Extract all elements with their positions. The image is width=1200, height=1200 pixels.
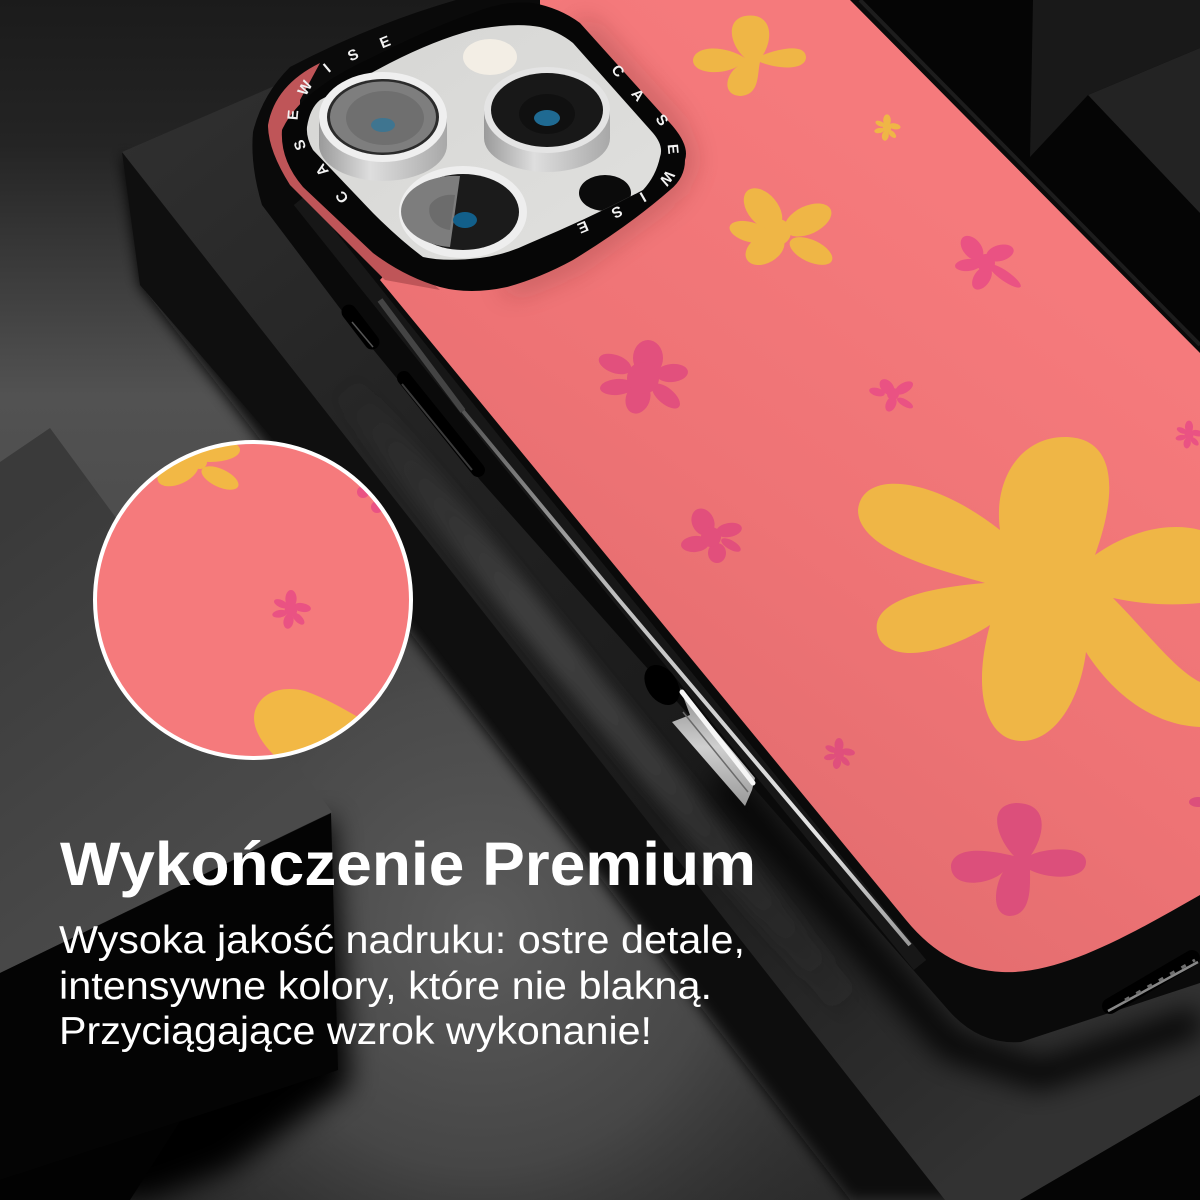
upper right block top face <box>1088 48 1200 213</box>
flower: pink edge <box>1175 421 1200 449</box>
zoom circle detail <box>95 438 411 760</box>
power button <box>637 658 755 806</box>
brand text: CASEWISE right arc: E <box>664 143 681 155</box>
upper right background block <box>1030 0 1200 157</box>
case lip crescent <box>268 63 440 290</box>
heading: Wykończenie Premium <box>60 830 756 898</box>
case highlight stripe <box>463 411 910 945</box>
description <box>59 919 745 1053</box>
brand text: CASEWISE left arc: E <box>377 33 393 52</box>
flower: pink right edge <box>1189 797 1200 807</box>
floor light pool <box>0 500 910 1200</box>
flower: circle right pink <box>357 486 383 513</box>
camera bezel <box>282 2 686 291</box>
flower: pink bottom <box>951 803 1086 916</box>
flower: circle top yellow <box>158 444 240 490</box>
circle ring <box>95 442 411 758</box>
phone cast shadow <box>720 780 1200 1075</box>
pedestal top highlight band <box>340 380 860 1020</box>
flower: circle pink <box>272 590 312 630</box>
flower: pink upper right <box>955 236 1021 290</box>
circle fill <box>95 442 411 758</box>
brand text: CASEWISE right arc <box>575 62 681 236</box>
pedestal bottom right front face <box>1020 1095 1200 1200</box>
brand text: CASEWISE left arc: W <box>295 77 317 99</box>
brand text: CASEWISE right arc: S <box>652 111 671 129</box>
case side glare <box>380 300 463 411</box>
brand text: CASEWISE left arc <box>285 33 393 206</box>
flower: yellow small <box>874 114 901 141</box>
lens: left <box>319 72 447 181</box>
brand text: CASEWISE right arc: A <box>628 86 648 105</box>
lower left block shadow <box>0 815 350 1200</box>
brand text: CASEWISE left arc: A <box>312 160 332 179</box>
flower: yellow top <box>693 16 806 96</box>
camera island <box>268 2 686 291</box>
brand text: CASEWISE right arc: W <box>655 167 678 189</box>
flower pattern <box>507 16 1200 916</box>
right edge glint <box>860 0 1200 345</box>
upper right black recess <box>850 0 1200 353</box>
brand text: CASEWISE left arc: E <box>285 109 302 121</box>
brand text: CASEWISE left arc: S <box>345 46 361 65</box>
camera shadow on panel <box>507 23 685 287</box>
pedestal side face <box>122 152 700 860</box>
flower: pink small <box>869 379 913 412</box>
brand text: CASEWISE right arc: I <box>637 188 649 205</box>
description line 3: Przyciągające wzrok wykonanie! <box>59 1010 652 1053</box>
charging port <box>1108 958 1198 1011</box>
upper side button <box>349 312 373 347</box>
pedestal side shadow <box>122 152 1000 1200</box>
flower: pink lower small <box>824 738 856 770</box>
brand text: CASEWISE left arc: S <box>291 137 310 152</box>
brand text: CASEWISE left arc: C <box>332 187 352 206</box>
text block <box>59 830 756 1053</box>
flash <box>463 39 517 75</box>
case body <box>252 0 1200 1042</box>
phone case <box>252 0 1200 1042</box>
lidar sensor <box>579 175 631 211</box>
lower left block front face <box>0 813 338 1180</box>
description line 2: intensywne kolory, które nie blakną. <box>59 965 712 1008</box>
lens: right <box>484 67 610 172</box>
brand text: CASEWISE right arc: S <box>609 202 625 221</box>
camera glass plate <box>307 25 661 260</box>
brand text: CASEWISE right arc: C <box>608 62 628 81</box>
lens: bottom <box>399 166 527 258</box>
flower: big yellow <box>858 437 1200 741</box>
description line 1: Wysoka jakość nadruku: ostre detale, <box>59 919 745 962</box>
flower: pink middle <box>680 505 743 563</box>
lower left block top face <box>0 428 332 973</box>
volume button <box>402 378 478 470</box>
brand text: CASEWISE right arc: E <box>575 217 591 236</box>
bottom left dark corner <box>0 1090 200 1200</box>
case side wall <box>300 200 920 965</box>
flower: yellow middle <box>730 188 832 265</box>
brand text: CASEWISE left arc: I <box>320 61 334 76</box>
flower: circle bottom yellow <box>254 689 358 760</box>
pink back panel <box>380 0 1200 972</box>
flower: pink left <box>596 340 689 417</box>
